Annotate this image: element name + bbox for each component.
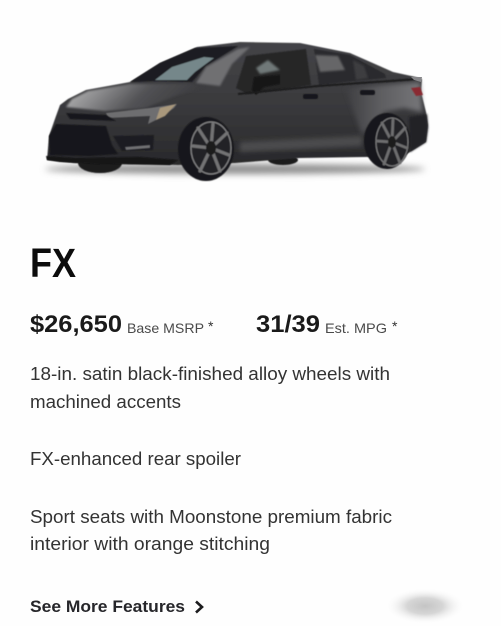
side mirror xyxy=(252,75,280,95)
car image xyxy=(45,42,428,181)
icon: chevron right xyxy=(196,602,202,612)
upper grille strip xyxy=(66,113,116,121)
front lip xyxy=(46,156,178,165)
price stat: Base MSRP xyxy=(127,320,204,336)
spoiler xyxy=(411,77,422,82)
feature: wheels: 18-in. satin black-finished alloy wheels with xyxy=(30,364,390,384)
price stat: * xyxy=(208,318,214,334)
door handles xyxy=(303,90,375,99)
belt line xyxy=(238,79,418,94)
price stat xyxy=(30,311,214,338)
fog light vent xyxy=(113,135,154,151)
feature: seats: interior with orange stitching xyxy=(30,534,270,554)
see more features link: See More Features xyxy=(30,597,185,616)
front wheel xyxy=(178,117,234,181)
feature: wheels xyxy=(30,364,390,412)
front grille xyxy=(49,124,118,156)
feature: wheels: machined accents xyxy=(30,392,181,412)
mpg stat: 31/39 xyxy=(256,311,320,338)
window reflections xyxy=(256,55,368,80)
mpg stat xyxy=(256,311,398,338)
pillar and roof highlight xyxy=(196,47,250,86)
ground shadow xyxy=(45,164,425,174)
car body xyxy=(47,42,428,165)
mpg stat: * xyxy=(392,318,398,334)
rear wheel xyxy=(364,113,410,169)
side windows xyxy=(236,49,386,94)
hood surface xyxy=(66,84,205,111)
feature: seats: Sport seats with Moonstone premium fabric xyxy=(30,507,392,527)
center tire xyxy=(268,155,298,165)
rear bumper xyxy=(409,114,428,152)
blurred smudge xyxy=(385,588,465,624)
mpg stat: Est. MPG xyxy=(325,320,387,336)
feature: spoiler: FX-enhanced rear spoiler xyxy=(30,449,241,469)
headlight xyxy=(106,104,177,124)
front left tire xyxy=(78,153,122,173)
feature: seats xyxy=(30,507,392,554)
title: FX xyxy=(30,240,76,286)
rear quarter highlight xyxy=(345,82,422,135)
tail light xyxy=(411,87,423,96)
door crease highlight xyxy=(240,136,362,152)
windshield xyxy=(130,46,238,82)
price stat: $26,650 xyxy=(30,311,122,338)
